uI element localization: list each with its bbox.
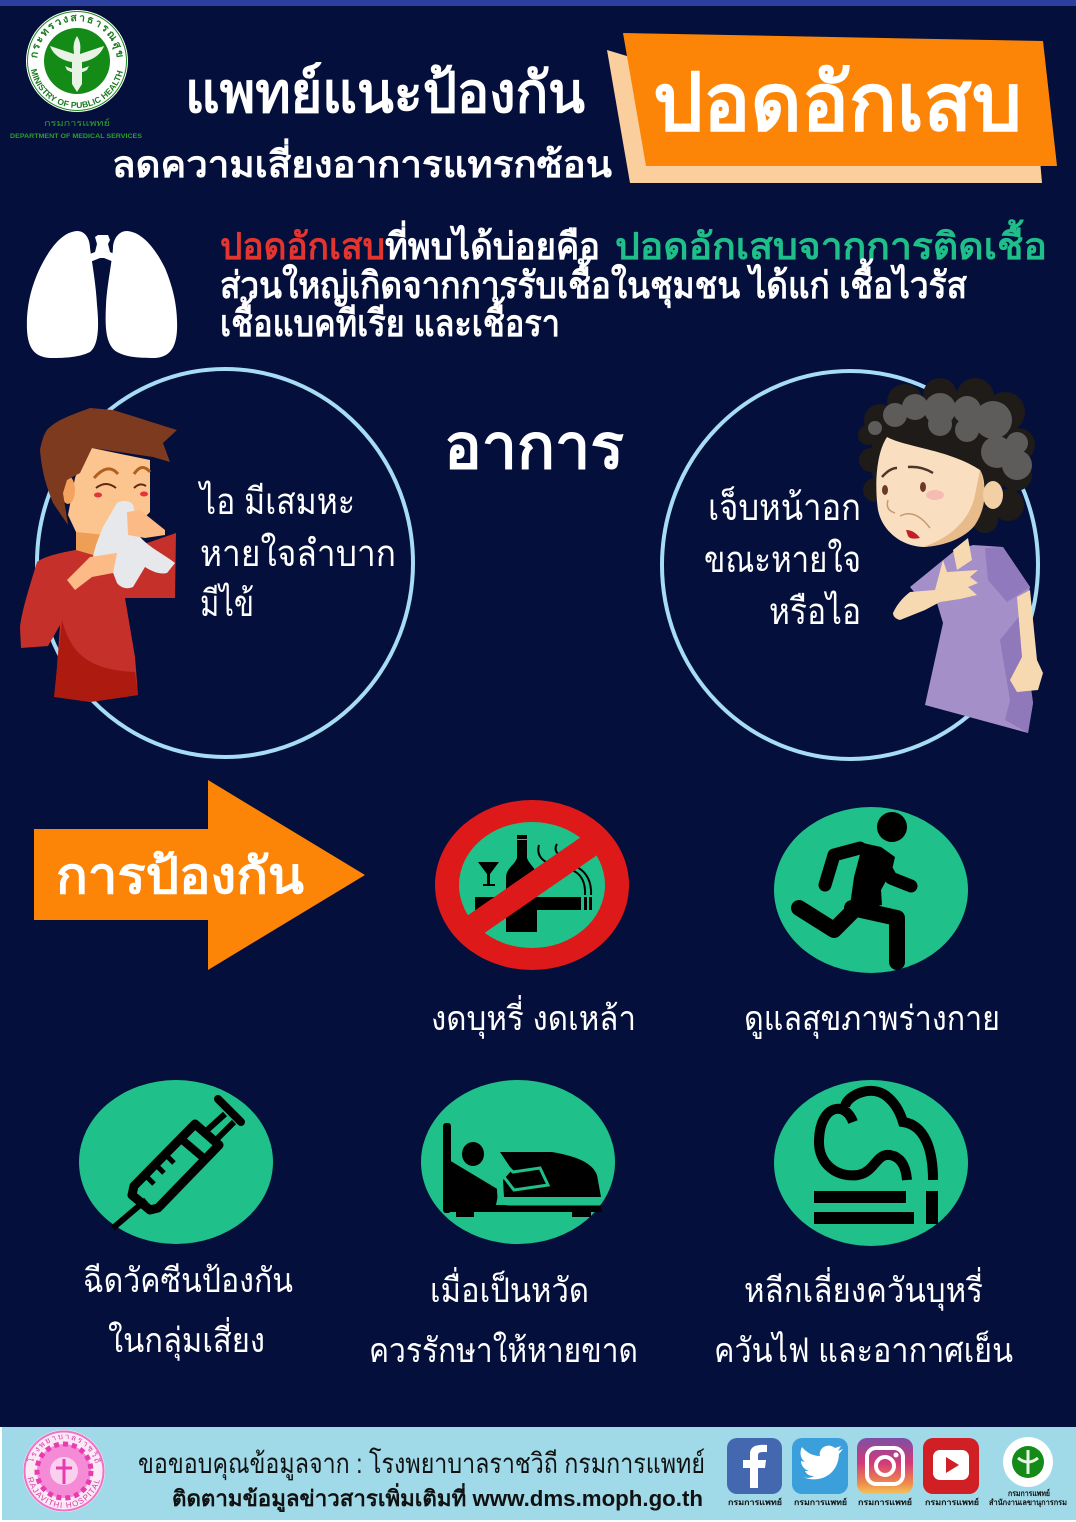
icon: syringe <box>79 1080 273 1244</box>
symptoms panel: left circle <box>20 369 413 757</box>
symptoms panel: right circle <box>662 371 1043 759</box>
logo: Rajavithi hospital: RAJAVITHI HOSPITAL <box>28 1477 100 1508</box>
logo: ministry of public health: กรมการแพทย์ <box>44 117 110 128</box>
logo: Rajavithi hospital: โรงพยาบาลราชวิถี <box>26 1434 102 1464</box>
icon: twitter <box>792 1438 848 1494</box>
social labels: กรมการแพทย์ <box>728 1497 782 1507</box>
logo: small ministry <box>1003 1437 1053 1487</box>
logo: ministry of public health: กระทรวงสาธารณสุข <box>31 14 123 58</box>
intro paragraph: เชื้อแบคทีเรีย และเชื้อรา <box>220 296 560 344</box>
caption: no smoking no alcohol: งดบุหรี่ งดเหล้า <box>431 995 636 1039</box>
caption: vaccine: ในกลุ่มเสี่ยง <box>108 1317 265 1361</box>
logo: Rajavithi hospital <box>23 1430 105 1512</box>
logo: ministry of public health: DEPARTMENT OF MEDICAL SERVICES <box>10 133 143 140</box>
icon: facebook <box>727 1438 782 1494</box>
symptom text right: หรือไอ <box>769 590 861 632</box>
prevention arrow <box>34 780 365 970</box>
caption: body care: ดูแลสุขภาพร่างกาย <box>744 1000 1000 1039</box>
symptom text left <box>197 480 396 624</box>
social labels: สำนักงานเลขานุการกรม <box>989 1498 1067 1508</box>
title: ลดความเสี่ยงอาการแทรกซ้อน <box>112 138 612 185</box>
caption: cold care <box>369 1267 638 1370</box>
intro paragraph: ปอดอักเสบจากการติดเชื้อ <box>615 219 1047 267</box>
symptom text right <box>704 484 861 632</box>
heading: อาการ: อาการ <box>444 413 624 482</box>
banner: ปอดอักเสบ: ปอดอักเสบ <box>653 58 1022 147</box>
illustration: woman with chest pain <box>858 378 1043 733</box>
icon: youtube <box>923 1438 979 1494</box>
symptom text right: เจ็บหน้าอก <box>708 484 861 528</box>
symptom text right: ขณะหายใจ <box>704 538 861 580</box>
footer credits <box>138 1447 705 1513</box>
caption: vaccine: ฉีดวัคซีนป้องกัน <box>83 1262 293 1300</box>
footer credits: ติดตามข้อมูลข่าวสารเพิ่มเติมที่ www.dms.moph.go.th <box>172 1482 703 1513</box>
caption: avoid smoke: ควันไฟ และอากาศเย็น <box>714 1330 1013 1370</box>
intro paragraph <box>220 219 1047 344</box>
title <box>112 61 612 185</box>
caption: cold care: ควรรักษาให้หายขาด <box>369 1331 638 1370</box>
icon: instagram <box>857 1438 913 1494</box>
footer <box>0 1427 1076 1522</box>
symptom text left: หายใจลำบาก <box>200 532 396 574</box>
logo: ministry of public health <box>10 10 143 140</box>
caption: avoid smoke <box>714 1267 1013 1370</box>
social labels <box>728 1488 1067 1508</box>
symptom text left: ไอ มีเสมหะ <box>197 480 355 522</box>
title: แพทย์แนะป้องกัน <box>185 61 585 124</box>
social labels: กรมการแพทย์ <box>925 1497 979 1507</box>
icon: smoke <box>774 1080 968 1246</box>
social labels: กรมการแพทย์ <box>1008 1488 1050 1498</box>
icon: lungs <box>27 231 177 358</box>
logo: ministry of public health: MINISTRY OF PUBLIC HEALTH <box>30 68 123 108</box>
caption: avoid smoke: หลีกเลี่ยงควันบุหรี่ <box>744 1267 983 1311</box>
caption: vaccine <box>83 1262 293 1361</box>
icon: patient in bed <box>421 1080 615 1244</box>
caption: cold care: เมื่อเป็นหวัด <box>430 1267 589 1310</box>
illustration: man sneezing <box>20 408 177 702</box>
footer credits: ขอขอบคุณข้อมูลจาก : โรงพยาบาลราชวิถี กรมการแพทย์ <box>138 1447 705 1481</box>
intro paragraph: ส่วนใหญ่เกิดจากการรับเชื้อในชุมชน ได้แก่ เชื้อไวรัส <box>220 258 967 309</box>
icon: no smoking no alcohol <box>435 800 629 970</box>
social labels: กรมการแพทย์ <box>794 1497 847 1507</box>
social labels: กรมการแพทย์ <box>858 1497 912 1507</box>
banner: ปอดอักเสบ <box>607 33 1057 183</box>
intro paragraph: ที่พบได้บ่อยคือ <box>385 220 600 267</box>
symptom text left: มีไข้ <box>200 582 254 624</box>
icon: running <box>774 807 968 973</box>
prevention arrow: การป้องกัน <box>56 848 304 904</box>
intro paragraph: ปอดอักเสบ <box>220 226 385 267</box>
